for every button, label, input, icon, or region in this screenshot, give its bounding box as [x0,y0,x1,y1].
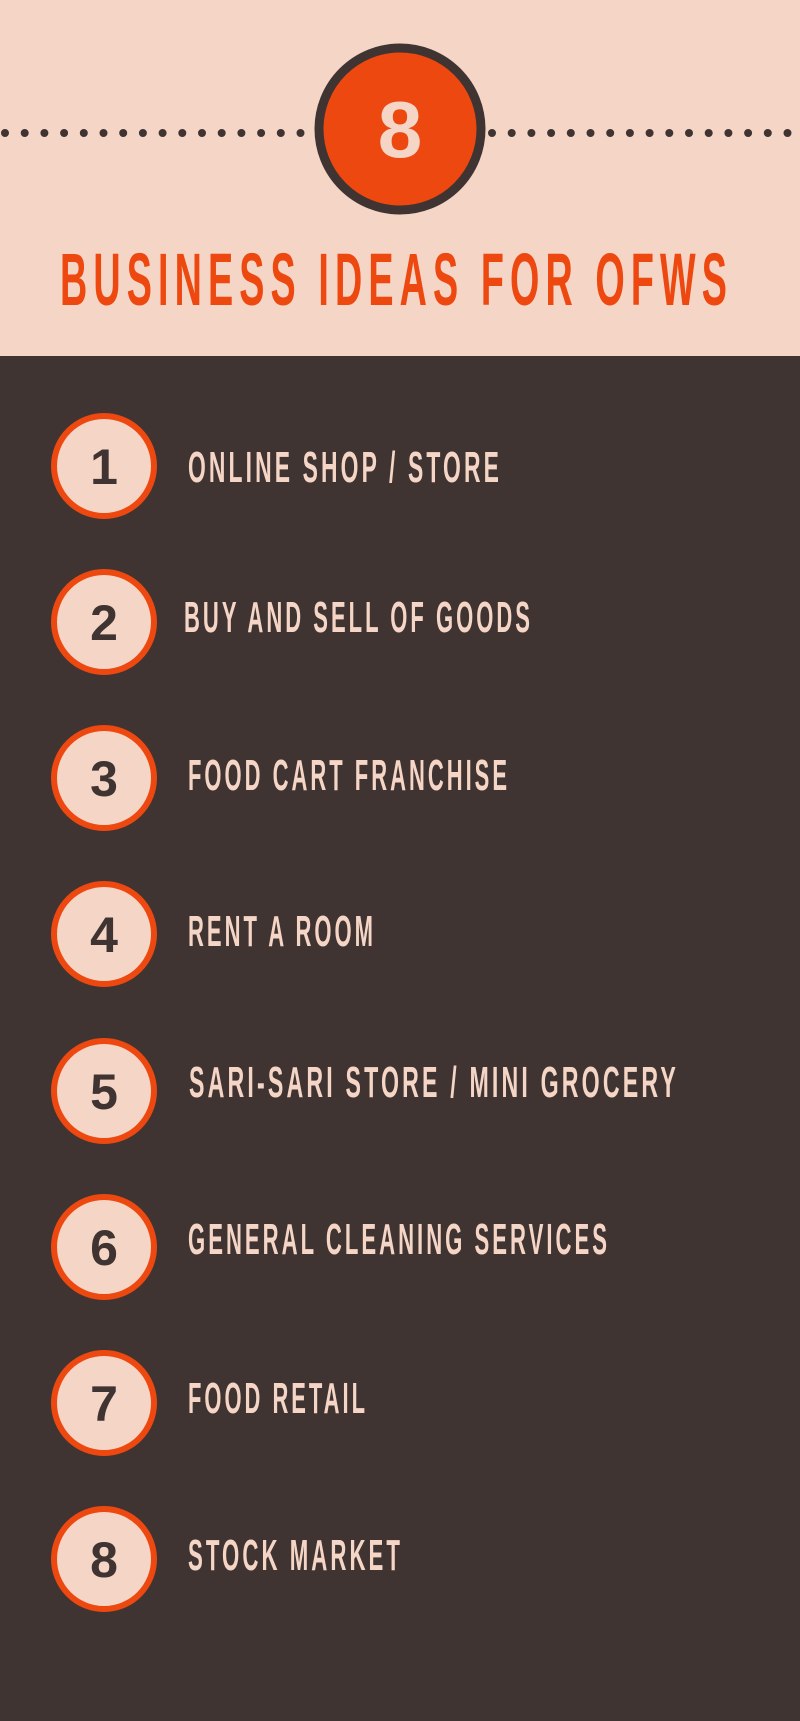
item 3 [54,728,510,828]
item 2 [54,572,533,672]
badge: 8 [319,48,481,210]
item 5: 5 [90,1064,118,1120]
dotted line right [492,129,795,137]
item 1: ONLINE SHOP / STORE [188,443,502,492]
item 7 [54,1353,368,1453]
list panel: FOOD RETAIL [188,1374,368,1423]
dotted line left [5,129,312,137]
item 4 [54,884,376,984]
item 2: 2 [90,595,118,651]
item 4: RENT A ROOM [188,907,376,956]
item 3: 3 [90,751,118,807]
item 1: 1 [90,439,118,495]
item 7: 7 [90,1376,118,1432]
item 8: 8 [90,1532,118,1588]
item 1 [54,416,502,516]
header panel [0,0,800,356]
list panel [54,416,679,1609]
badge: 8: 8 [378,85,422,174]
item 4: 4 [90,907,118,963]
item 6: 6 [90,1220,118,1276]
item 8 [54,1509,403,1609]
item 6 [54,1197,610,1297]
item 8: STOCK MARKET [188,1531,403,1580]
item 5 [54,1041,679,1141]
